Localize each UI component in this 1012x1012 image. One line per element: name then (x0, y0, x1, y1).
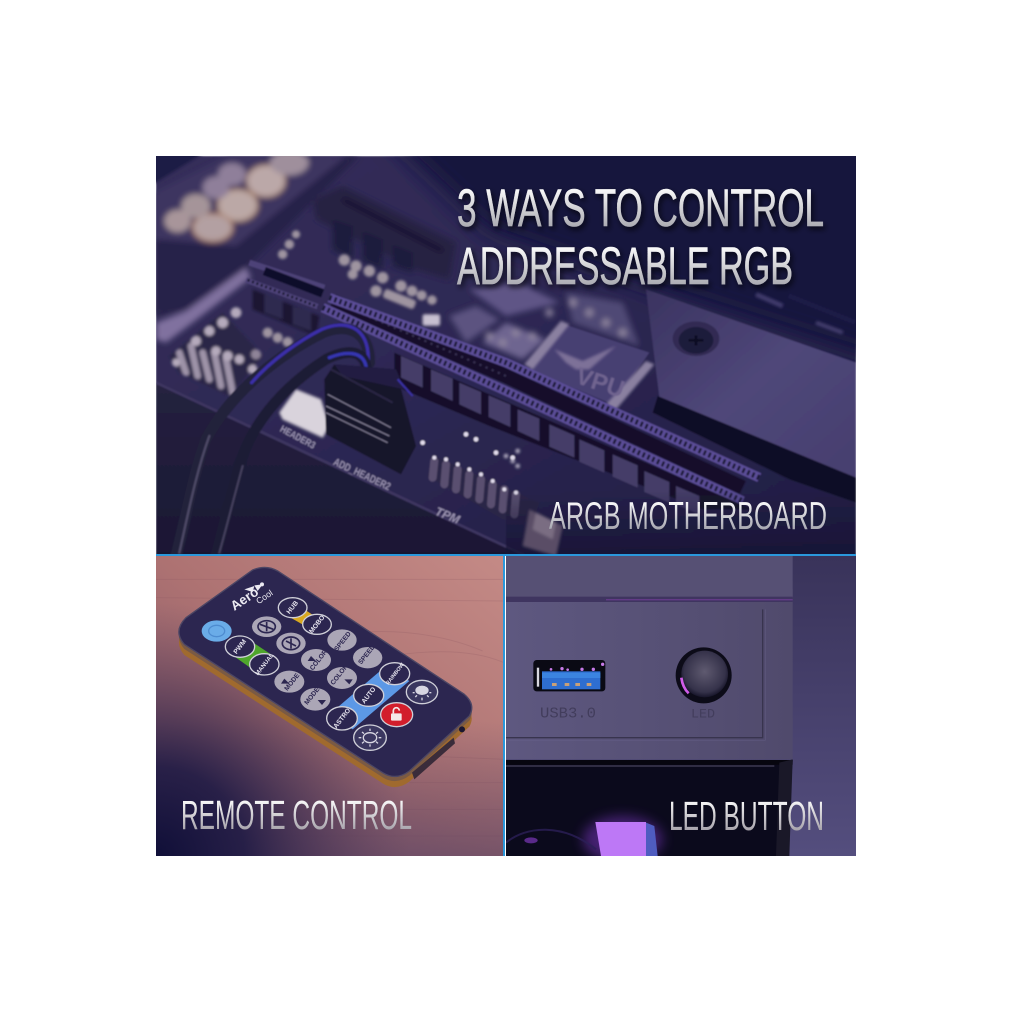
label: remote control: REMOTE CONTROL (181, 792, 412, 838)
main PCIe slots (246, 263, 759, 501)
surface dots on board (263, 230, 440, 347)
wood grain (186, 579, 503, 760)
remote face (179, 567, 472, 776)
AeroCool logo: Aero (228, 584, 261, 613)
panel: remote control photo (156, 556, 504, 856)
remote buttons (202, 598, 438, 750)
case window with purple light (506, 759, 793, 863)
pin header left (169, 307, 263, 396)
label: LED button: LED BUTTON (669, 793, 824, 839)
button labels and icons: MODE (303, 686, 322, 706)
capacitor area (156, 150, 359, 343)
button labels and icons: MOBO (308, 614, 327, 635)
panel: LED button photo (506, 556, 856, 863)
heatsink with screw (646, 289, 856, 503)
right board chips, blurred (449, 283, 639, 359)
button labels and icons (209, 600, 431, 747)
label: ARGB motherboard: ARGB MOTHERBOARD (549, 495, 827, 538)
AeroCool logo (232, 582, 273, 611)
PC case front (506, 556, 793, 759)
lower right circuit parts (504, 449, 563, 556)
button labels and icons: MODE (283, 672, 302, 692)
board silk text: ADD_HEADER2 (331, 456, 392, 493)
AeroCool logo: Cool (254, 588, 275, 606)
remote gold edge (178, 639, 472, 788)
board silk text: HEADER3 (278, 424, 317, 452)
remote side shade (179, 637, 472, 782)
USB 3.0 port (533, 660, 605, 691)
USB3.0 silk text: USB3.0 (540, 707, 596, 723)
VRM chip with logo: VPU (572, 363, 628, 404)
button labels and icons: SPEED (357, 644, 377, 666)
remote body (179, 567, 472, 787)
button labels and icons: PWM (233, 638, 248, 656)
blue divider lines (156, 554, 856, 856)
button labels and icons: MANUAL (255, 653, 276, 677)
button labels and icons: COLOR (330, 663, 350, 687)
slot under-blocks (394, 353, 753, 514)
LED button (676, 647, 732, 703)
LED silk text: LED (691, 708, 715, 723)
TPM pin header (419, 430, 521, 519)
button labels and icons: ASTRO (332, 707, 352, 730)
button labels and icons: RAINBOW (385, 661, 406, 686)
button labels and icons: SPEED (333, 630, 353, 653)
button labels and icons: AUTO (361, 686, 378, 705)
colored mode strips (291, 611, 312, 624)
board silk text: TPM (433, 504, 463, 527)
title (457, 179, 824, 296)
button labels and icons: HUB (286, 600, 300, 616)
ARGB connector (324, 364, 416, 474)
title: ADDRESSABLE RGB (457, 237, 793, 296)
white ARGB header (279, 389, 329, 438)
upper expansion slot (313, 186, 456, 279)
title: 3 WAYS TO CONTROL (457, 179, 824, 238)
button labels and icons: COLOR (309, 649, 329, 672)
board silk text (278, 424, 463, 527)
left short slot blocks (253, 289, 319, 336)
VRM chip with logo (524, 321, 654, 409)
remote end port (412, 738, 455, 779)
PCB traces behind heatsink (756, 294, 856, 333)
cables (176, 325, 369, 556)
desk surface (156, 383, 526, 556)
panel: ARGB motherboard photo (156, 156, 856, 554)
